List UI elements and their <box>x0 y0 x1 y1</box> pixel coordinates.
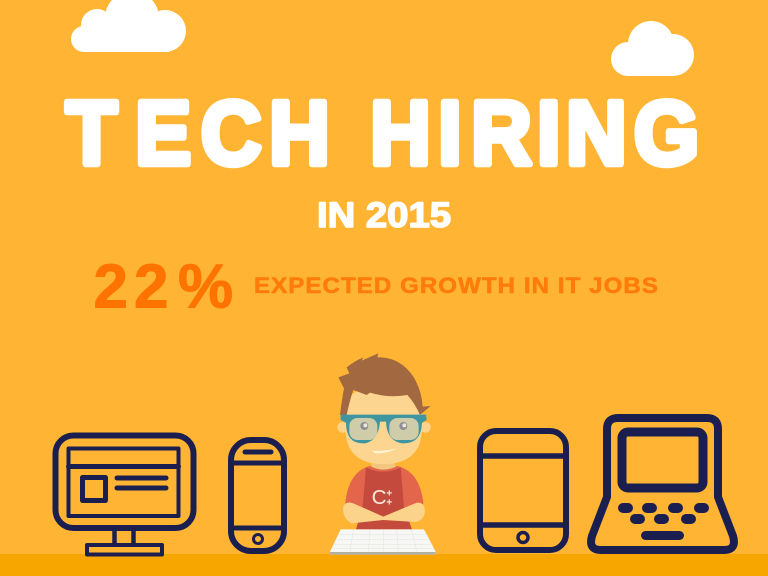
ears <box>337 422 348 433</box>
subtitle: in 2015: IN 2015 <box>317 196 451 235</box>
icon: laptop <box>591 418 734 550</box>
t-shirt <box>345 466 423 529</box>
mouth <box>372 448 397 453</box>
t-shirt: C <box>372 486 387 509</box>
icon: tablet <box>480 431 566 550</box>
icon: left cloud <box>71 0 186 52</box>
t-shirt: + <box>386 489 392 500</box>
neck <box>372 453 395 473</box>
crossed arms <box>343 502 425 523</box>
hair <box>338 353 431 415</box>
t-shirt: + <box>386 497 392 508</box>
icon: right cloud <box>611 21 694 76</box>
keyboard <box>330 529 436 555</box>
ground band <box>0 554 768 576</box>
glasses <box>341 415 427 443</box>
icon: smartphone <box>231 440 284 551</box>
illustration: developer character <box>330 353 436 555</box>
icon: desktop monitor <box>56 436 194 554</box>
statistic: 22%: 22% <box>94 252 233 322</box>
title: TECH HIRING <box>0 83 699 184</box>
statistic label: EXPECTED GROWTH IN IT JOBS <box>254 273 659 298</box>
face <box>345 387 422 464</box>
